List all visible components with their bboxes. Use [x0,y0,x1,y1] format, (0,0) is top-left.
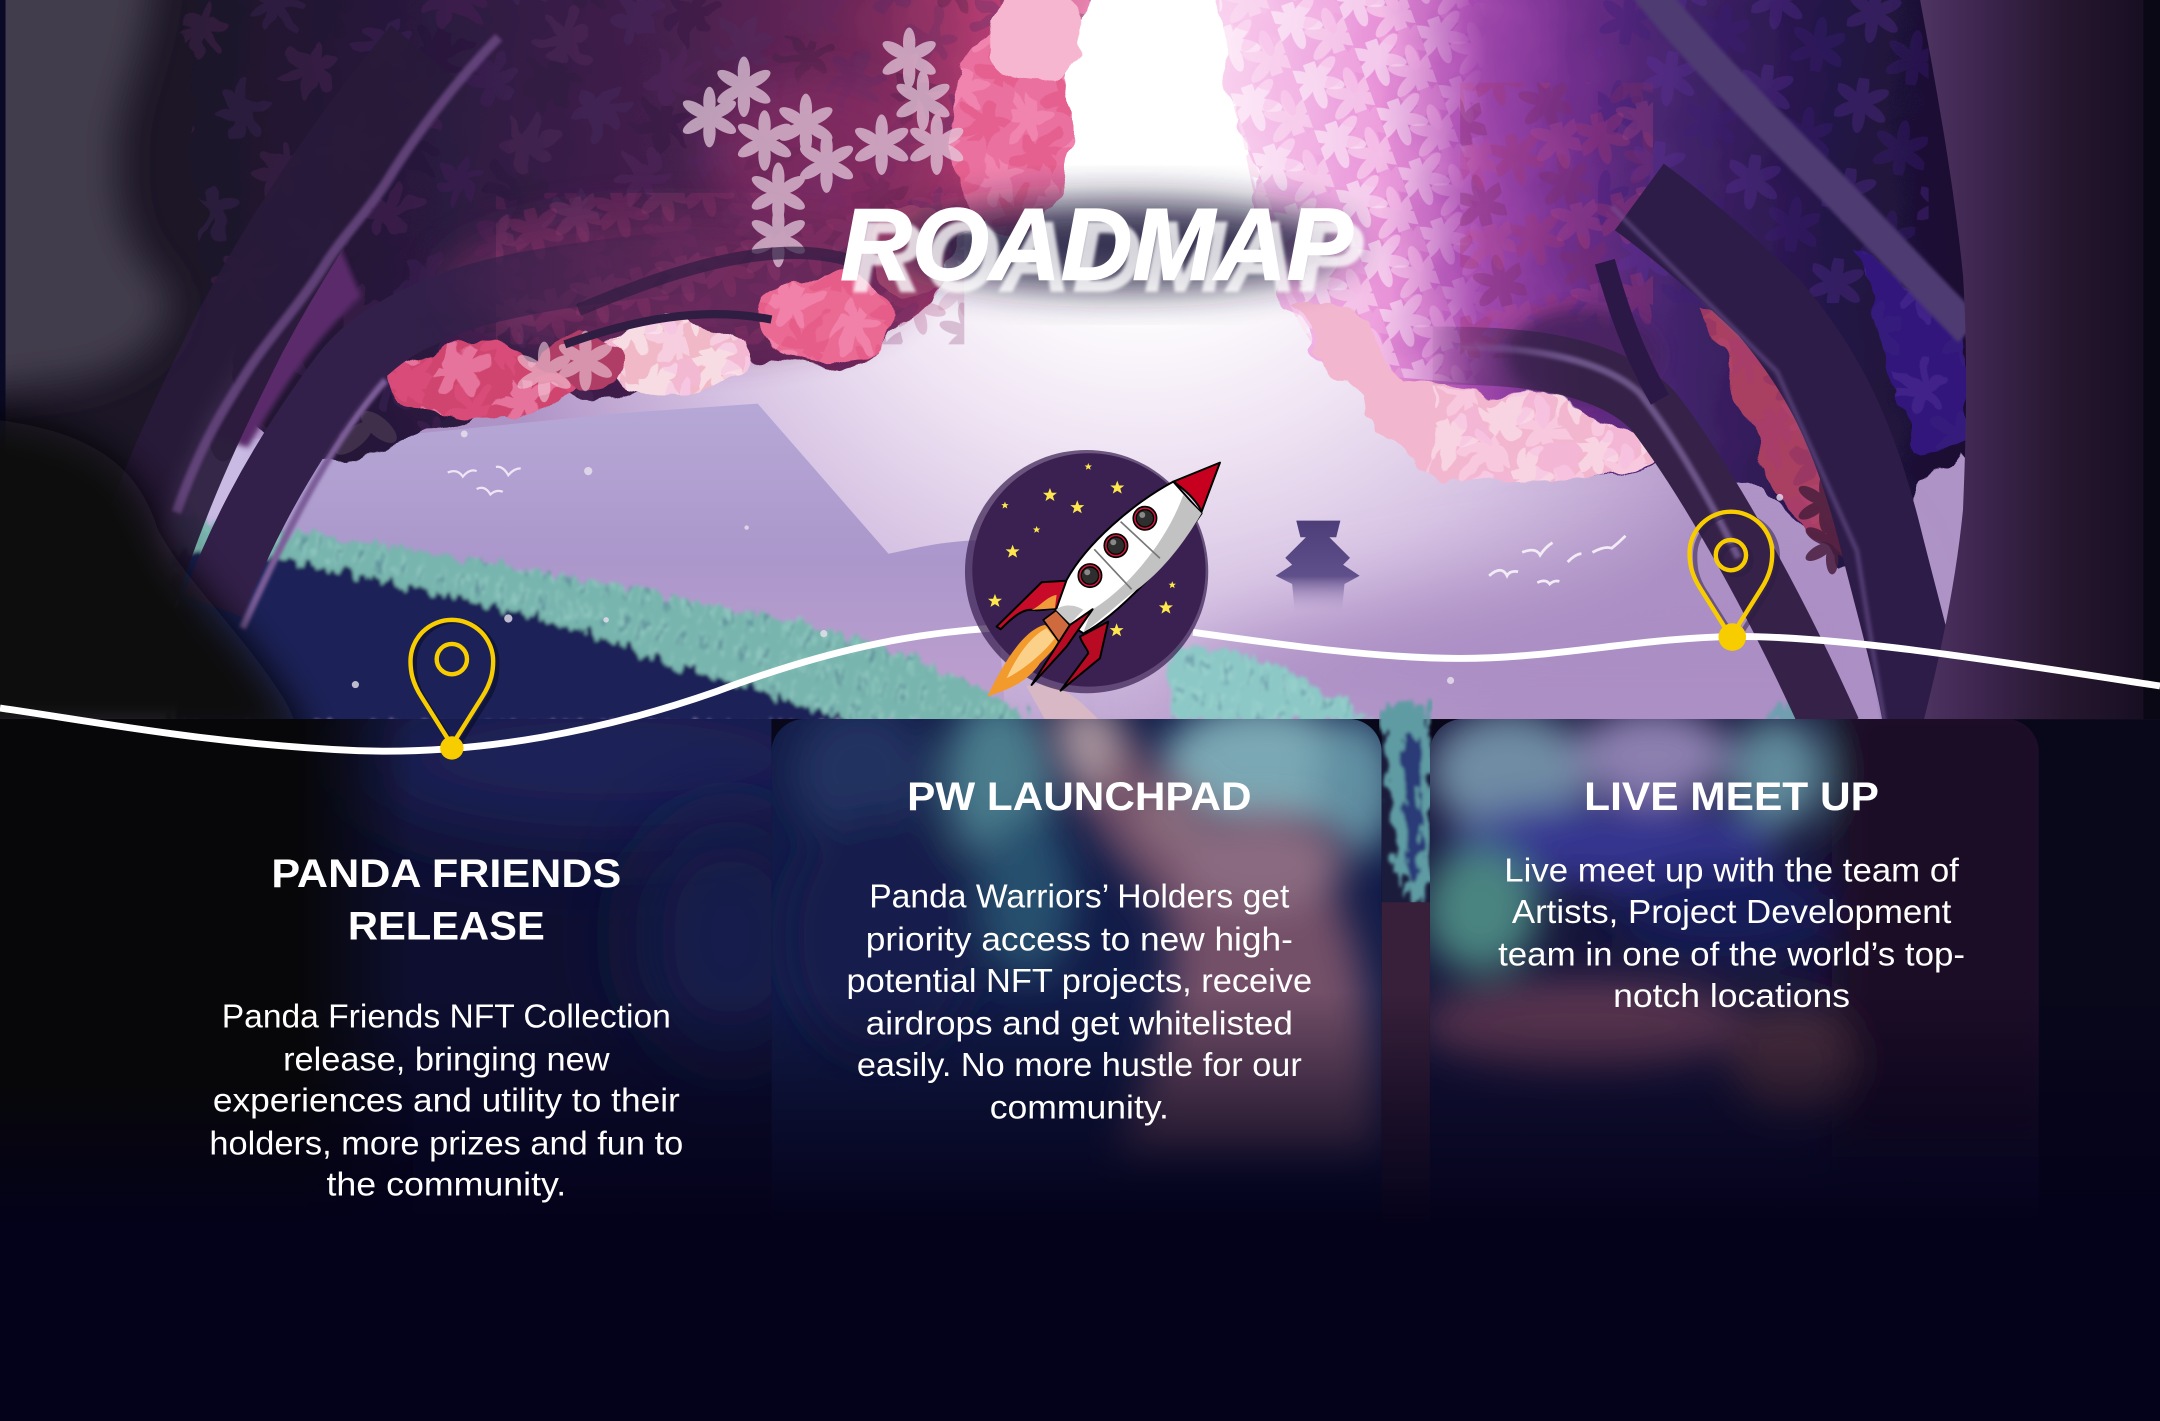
pagoda [1276,521,1360,613]
text block: PW Launchpad: PW LAUNCHPAD [907,775,1252,819]
grass left [172,517,1033,723]
text block: PW Launchpad: Panda Warriors’ Holders get [869,879,1289,916]
panel: left blur [276,675,868,1270]
text block: Live Meet Up: LIVE MEET UP [1584,775,1879,819]
text block: Panda Friends Release: the community. [326,1167,566,1204]
grass right [1171,645,1860,723]
dark backdrop left [6,0,236,507]
text block: PW Launchpad: potential NFT projects, receive [847,963,1312,1000]
magenta petals near flowers [709,76,916,227]
roadmap path [0,628,2160,751]
gap grass [1382,705,1430,1226]
right canopy violet flowers [1598,0,1929,303]
text block: Panda Friends Release: RELEASE [348,904,545,948]
text block: Panda Friends Release [209,852,683,1204]
text block: Panda Friends Release: release, bringing new [283,1041,610,1078]
right canopy pale flowers [1219,0,1495,386]
top-left haze [0,0,170,393]
title: ROADMAP [851,200,1365,314]
far left lilac gap [167,406,260,530]
right canopy [1222,0,1984,565]
text block: Panda Friends Release: Panda Friends NFT Collection [222,999,671,1036]
text block: PW Launchpad: community. [990,1090,1169,1127]
magenta shadow core [1507,309,1661,402]
text block: Panda Friends Release: PANDA FRIENDS [271,852,621,896]
text block: Live Meet Up: Live meet up with the team of [1504,853,1960,890]
mauve mid canopy [441,214,909,351]
purple flowers between trunks [228,249,362,451]
text block: PW Launchpad [847,775,1312,1127]
panel: right blur [1419,689,2066,1421]
lower canopy flowers [391,207,948,419]
birds right [1489,536,1626,584]
text block: PW Launchpad: easily. No more hustle for our [857,1047,1302,1084]
left fade [0,719,413,1226]
sparkles [352,430,1783,688]
pink top cluster [952,0,1080,238]
text block: Panda Friends Release: holders, more prizes and fun to [209,1125,683,1162]
text block: Live Meet Up: team in one of the world’s top- [1498,937,1965,974]
marker: Live Meet Up [1690,512,1778,651]
flowers pale on canopy [680,28,966,267]
dirt path [1026,684,1102,723]
marker: Panda Friends [411,620,497,760]
dark flowers by marker [1796,472,1861,574]
text block: Panda Friends Release: experiences and utility to their [213,1083,680,1120]
left canopy and trunks [0,0,2160,730]
right misty ground [1185,551,1929,730]
background scene [0,0,2160,1112]
pale cluster on pink [515,331,615,402]
text block: PW Launchpad: priority access to new high- [866,921,1293,958]
bottom fade [0,992,2160,1226]
rose flowers right [1701,241,1967,550]
panel: centre blur [771,696,1398,1421]
birds left [448,467,521,495]
title: ROADMAP [840,188,1354,302]
lower base [0,719,2160,1421]
text block: Live Meet Up: notch locations [1613,978,1850,1015]
text block: Live Meet Up: Artists, Project Development [1512,894,1951,931]
icon: rocket badge [965,450,1220,697]
left trunks [117,37,854,634]
lower panels [0,675,2160,1421]
right trunks [1433,0,2160,730]
pale lower canopy [1295,306,1678,483]
lower-left black [0,413,310,744]
text block: Live Meet Up [1498,775,1965,1015]
text block: PW Launchpad: airdrops and get whitelisted [866,1005,1293,1042]
left mountain [186,404,1006,716]
scalloped dark leaves [211,411,397,462]
